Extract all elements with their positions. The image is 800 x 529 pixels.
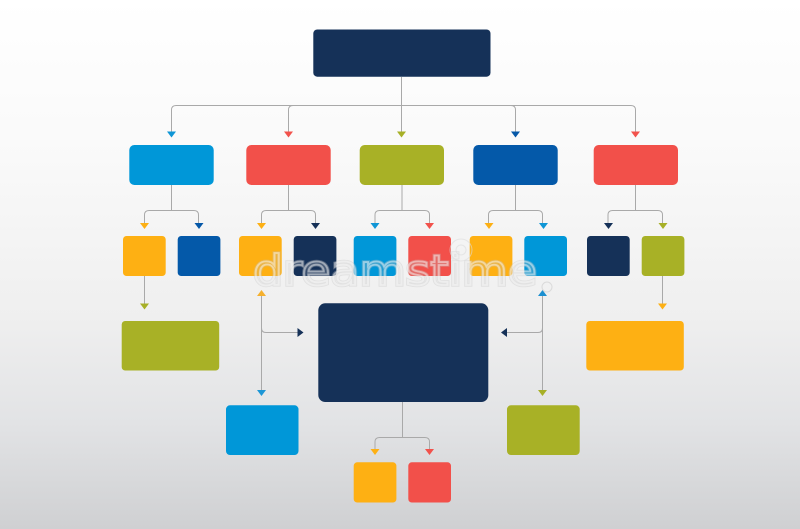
top box: [313, 30, 490, 77]
side result boxes: [122, 321, 684, 455]
watermark: dreamstime: [253, 246, 537, 295]
centre box: [318, 303, 488, 402]
level 3 arrows: [140, 223, 668, 229]
connector lines: [144, 77, 662, 450]
level 2 arrows: [167, 132, 640, 138]
bottom boxes: [354, 462, 451, 502]
level 2 boxes: [129, 145, 678, 185]
level 3 boxes: [123, 236, 684, 276]
watermark: dreamstime: [253, 246, 537, 295]
lower arrows: [140, 290, 667, 455]
